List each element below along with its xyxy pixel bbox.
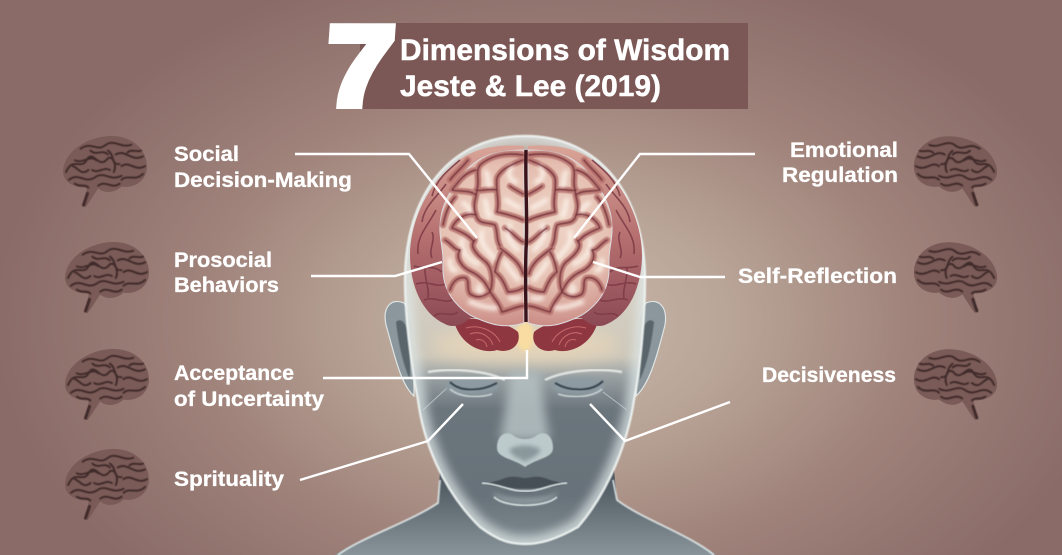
line: emotional regulation — [574, 154, 755, 238]
line: prosocial behaviors — [311, 262, 442, 276]
label: prosocial behaviors — [174, 249, 279, 297]
left ear — [385, 302, 414, 396]
central fissure — [526, 150, 527, 322]
right eye — [545, 370, 622, 397]
label: acceptance of uncertainty: Acceptance — [174, 362, 294, 385]
label: prosocial behaviors: Prosocial — [174, 249, 272, 272]
large numeral 7: 7 — [322, 3, 398, 129]
inner face rim — [405, 136, 645, 544]
head and face — [405, 136, 645, 544]
central head illustration — [335, 136, 716, 555]
label: social decision-making: Decision-Making — [174, 169, 352, 192]
icon: brain left 3 — [65, 349, 149, 420]
title background panel — [360, 23, 748, 109]
icon: brain right 2 — [914, 242, 997, 313]
brain — [410, 146, 642, 351]
label: acceptance of uncertainty — [174, 362, 324, 411]
title banner — [322, 3, 748, 129]
label: social decision-making — [174, 143, 352, 192]
label: emotional regulation: Emotional — [790, 139, 898, 162]
forehead glow — [430, 327, 620, 363]
left eye — [428, 370, 505, 397]
label: prosocial behaviors: Behaviors — [174, 274, 279, 297]
neck and shoulders — [335, 470, 716, 555]
icon: brain left 4 — [65, 449, 149, 520]
label: social decision-making: Social — [174, 143, 239, 166]
line: decisiveness — [590, 402, 730, 441]
nose — [497, 433, 553, 467]
central glow — [516, 321, 534, 351]
title line 2: Jeste & Lee (2019) — [400, 70, 661, 103]
line: acceptance of uncertainty — [323, 350, 527, 378]
left hemisphere — [410, 146, 524, 351]
line: self-reflection — [593, 262, 725, 277]
label: decisiveness: Decisiveness — [762, 364, 896, 387]
icon: brain right 1 — [914, 136, 997, 207]
line: spirituality — [300, 404, 463, 480]
icon: brain right 3 — [914, 349, 997, 420]
temple lines — [423, 388, 627, 410]
leader lines — [295, 154, 755, 480]
right ear — [636, 302, 666, 396]
mouth — [482, 477, 567, 505]
label: spirituality: Sprituality — [174, 468, 284, 491]
icon: brain left 1 — [63, 136, 147, 207]
icon: brain left 2 — [65, 242, 149, 313]
label: acceptance of uncertainty: of Uncertainty — [174, 388, 324, 411]
title line 1: Dimensions of Wisdom — [400, 34, 730, 67]
head outline — [405, 136, 645, 544]
nose bridge — [500, 372, 550, 440]
label: emotional regulation — [782, 139, 898, 187]
line: social decision-making — [295, 154, 477, 238]
label: self-reflection: Self-Reflection — [738, 265, 897, 288]
label: emotional regulation: Regulation — [782, 164, 898, 187]
right hemisphere — [528, 146, 642, 351]
